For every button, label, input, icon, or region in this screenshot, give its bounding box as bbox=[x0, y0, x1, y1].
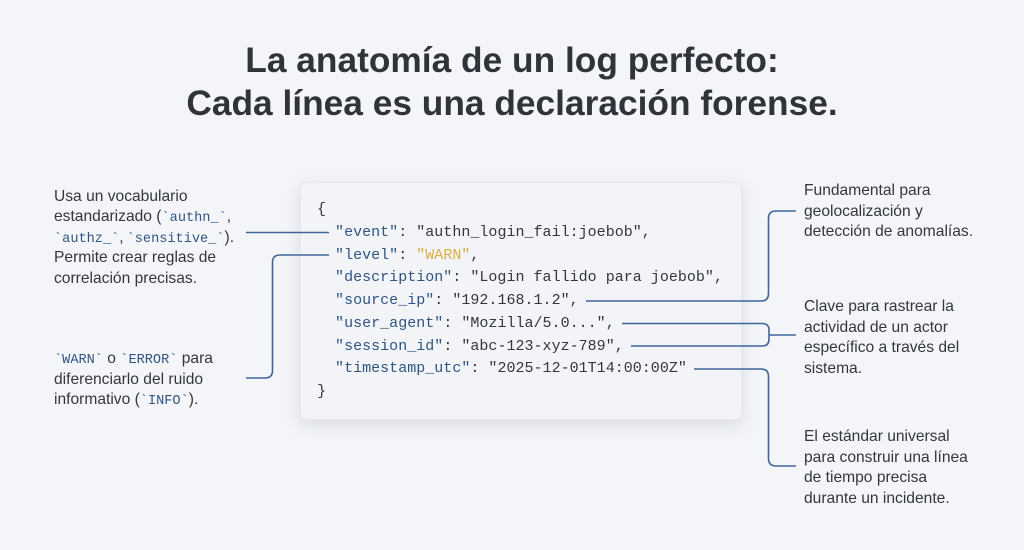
note: vocabulary: estandarizado (`authn_`, bbox=[54, 208, 231, 226]
note: geolocation: Fundamental para bbox=[804, 182, 931, 199]
panel: JSON log card bbox=[300, 182, 742, 420]
note: geolocation: geolocalización y bbox=[804, 202, 923, 220]
note: vocabulary: Permite crear reglas de bbox=[54, 249, 216, 266]
note: timeline: de tiempo precisa bbox=[804, 469, 927, 486]
note: vocabulary: `authz_`,`sensitive_`). bbox=[54, 228, 234, 246]
note: timeline: El estándar universal bbox=[804, 428, 950, 445]
title: La anatomía de un log perfecto: bbox=[245, 41, 779, 80]
code block: JSON log: { "event": "authn_login_fail:joebob", "level": "WARN", "description": "Login fallido para joebob", "source_ip": "192.168.1.2", "user_agent": "Mozilla/5.0...", "session_id": "abc-123-xyz-789", "timestamp_utc": "2025-12-01T14:00:00Z" } bbox=[317, 201, 723, 400]
arrow: user_agent and session_id to actor note bbox=[622, 324, 796, 346]
note: timeline bbox=[804, 428, 968, 506]
title bbox=[186, 41, 838, 123]
note: timeline: durante un incidente. bbox=[804, 490, 950, 506]
note: geolocation bbox=[804, 182, 973, 240]
note: actor tracking: Clave para rastrear la bbox=[804, 298, 954, 315]
arrow: source_ip to geolocation note bbox=[586, 211, 796, 301]
arrow: event to vocabulary note bbox=[246, 232, 329, 234]
title: Cada línea es una declaración forense. bbox=[186, 84, 838, 123]
note: severity: `WARN` o `ERROR` para bbox=[54, 350, 213, 368]
note: actor tracking bbox=[804, 298, 959, 376]
note: severity: informativo (`INFO`). bbox=[54, 391, 198, 409]
arrow: level to severity note bbox=[246, 255, 329, 378]
note: timeline: para construir una línea bbox=[804, 448, 968, 466]
arrow: timestamp to timeline note bbox=[694, 369, 796, 466]
note: actor tracking: específico a través del bbox=[804, 339, 959, 356]
note: actor tracking: actividad de un actor bbox=[804, 318, 948, 336]
note: severity: diferenciarlo del ruido bbox=[54, 370, 203, 388]
note: vocabulary bbox=[54, 188, 234, 286]
note: actor tracking: sistema. bbox=[804, 360, 862, 376]
note: geolocation: detección de anomalías. bbox=[804, 223, 973, 240]
note: vocabulary: correlación precisas. bbox=[54, 270, 197, 286]
note: vocabulary: Usa un vocabulario bbox=[54, 188, 188, 204]
note: severity bbox=[54, 350, 213, 409]
